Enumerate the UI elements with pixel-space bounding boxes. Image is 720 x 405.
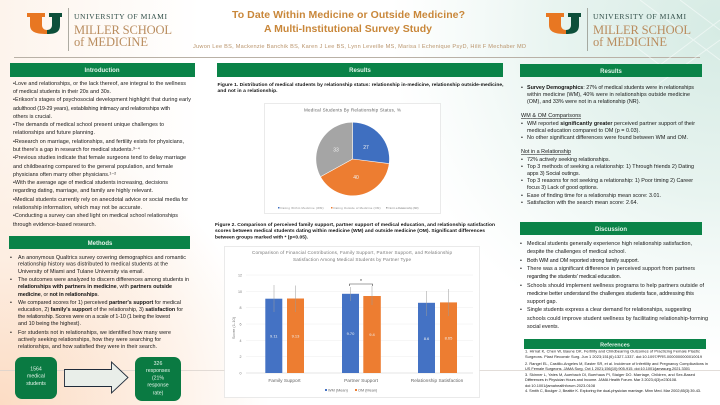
- text block: methods: [10, 255, 189, 350]
- pie legend: Dating Outside of Medicine (OM): [334, 206, 381, 210]
- text block: discussion: There was a significant difference in perceived support from partners: [527, 266, 695, 272]
- text block: introduction: •Medical students currently rely on anecdotal advice or social media for: [13, 197, 188, 203]
- heading: references: References: [600, 342, 630, 348]
- text block: discussion: social events.: [527, 324, 559, 330]
- icon: U mark: [27, 13, 62, 34]
- bars: 9.70: [347, 331, 355, 336]
- arrow: [64, 362, 128, 393]
- text block: WM and OM comparisons: •: [521, 135, 523, 141]
- pie chart: 40: [353, 175, 359, 181]
- text block: not in a relationship: Not in a Relationship: [521, 149, 571, 155]
- text block: not in a relationship: Ease of finding time for a relationship mean score: 3.01.: [527, 193, 661, 199]
- bars: 9.4: [369, 332, 376, 337]
- heading: references: [524, 339, 706, 349]
- text block: WM and OM comparisons: •: [521, 121, 523, 127]
- text block: references: Differences in Physician Hours and Income. JAMA Health Forum. Mar 3 2023;4(3):e230108.: [525, 377, 677, 382]
- text block: not in a relationship: focus 3) Lack of good options.: [527, 185, 598, 191]
- figure 1 caption: and not in a relationship.: [218, 88, 278, 94]
- left logo: MILLER SCHOOL: [74, 23, 172, 37]
- heading: introduction: [10, 63, 195, 77]
- bar chart panel: [224, 246, 480, 398]
- text block: survey demographics: within medicine (WM), 40% were in relationships outside medicine: [526, 92, 690, 98]
- callout: 326 responses: rate): [153, 390, 164, 396]
- heading: methods: [9, 236, 190, 249]
- text block: methods: An anonymous Qualtrics survey covering demographics and romantic: [18, 255, 186, 261]
- text block: methods: education, 2) family's support of the relationship, 3) satisfaction for: [18, 307, 183, 313]
- heading: results right: Results: [600, 69, 622, 75]
- text block: references: 1. Hirnat K, Chen W, Baune DK. Fertility and Childbearing Outcomes of Practicing Female Plastic: [525, 348, 700, 354]
- text block: introduction: physicians often marry other physicians.¹⁻²: [13, 172, 116, 178]
- heading: results right: [520, 64, 702, 77]
- bars: 8.65: [445, 336, 453, 340]
- text block: not in a relationship: •: [521, 157, 523, 163]
- text block: references: [525, 348, 708, 393]
- text block: discussion: •: [520, 283, 522, 289]
- callout: 1564 medical students: medical: [27, 374, 45, 380]
- text block: methods: relationships, and how satisfied they were in their search.: [18, 344, 157, 350]
- title: [232, 9, 465, 35]
- axis and gridlines: 4: [240, 339, 242, 343]
- text block: discussion: [520, 241, 708, 330]
- bars: 9.13: [292, 334, 300, 338]
- text block: references: 4. Smith C, Boulger J, Beattie K. Exploring the dual-physician marriage. Minn Med. Mar 2002;85(3):39-43.: [525, 388, 701, 393]
- right logo: UNIVERSITY OF MIAMI: [593, 12, 686, 21]
- text block: references: Surgeons. Plast Reconstr Surg. Jun 1 2023;151(6):1327-1337. doi:10.1097/PRS.0000000000010019: [525, 354, 702, 359]
- bar legend: OM (Mean): [358, 388, 378, 392]
- x labels: Relationship Satisfaction: [411, 378, 464, 384]
- bar chart panel: Comparison of Financial Contributions, Family Support, Partner Support, and Relationship: [252, 250, 452, 255]
- x labels: [268, 378, 464, 384]
- significance bracket: [350, 279, 372, 286]
- figure 2 caption: Figure 2. Comparison of perceived family support, partner support of medical education, and relationship satisfaction: [215, 222, 495, 228]
- axis and gridlines: 10: [238, 290, 242, 294]
- text block: survey demographics: [521, 85, 694, 105]
- bar legend: [325, 388, 378, 392]
- panel: results right: [520, 64, 702, 206]
- figure 2 caption: between groups marked with * (p<0.05).: [215, 234, 309, 240]
- text block: methods: the relationship. Scores were on a scale of 1-10 (1 being the lowest: [18, 314, 170, 320]
- text block: discussion: support gap.: [527, 299, 557, 305]
- text block: introduction: adulthood (19-29 years), establishing intimacy and relationships with: [13, 106, 170, 112]
- text block: not in a relationship: apps 3) Social outings.: [527, 171, 580, 177]
- text block: discussion: •: [520, 307, 522, 313]
- text block: not in a relationship: [521, 149, 694, 206]
- text block: methods: •: [10, 300, 12, 306]
- text block: WM and OM comparisons: [521, 113, 695, 141]
- authors: Juwon Lee BS, Mackenzie Banchik BS, Karen J Lee BS, Lynn Leveille MS, Marisa I Echenique PsyD, Hilit F Mechaber MD: [193, 44, 526, 50]
- figure 2 caption: scores between medical students dating within medicine (WM) and outside medicine (OM). Significant differences: [215, 228, 485, 234]
- right logo: [546, 8, 691, 51]
- text block: introduction: •Research on marriage, relationships, and fertility exists for physicians,: [13, 139, 184, 145]
- callout: 326 responses: responses: [146, 368, 170, 374]
- left logo: UNIVERSITY OF MIAMI: [74, 12, 167, 21]
- text block: discussion: Both WM and OM reported strong family support.: [527, 258, 639, 264]
- panel: introduction: [10, 63, 195, 228]
- text block: methods: and 10 being the highest).: [18, 321, 81, 327]
- callout: 326 responses: response: [147, 382, 169, 388]
- axis and gridlines: Score (1-10): [231, 316, 236, 339]
- text block: methods: relationships with partners in medicine, with partners outside: [18, 284, 172, 290]
- panel: methods: [9, 236, 190, 401]
- text block: discussion: •: [520, 258, 522, 264]
- text block: not in a relationship: Satisfaction with the search mean score: 2.64.: [527, 200, 638, 206]
- text block: methods: For students not in relationships, we identified how many were: [18, 330, 171, 336]
- text block: methods: relationship history was distributed to medical students at the: [18, 262, 168, 268]
- panel: results center: [215, 63, 504, 398]
- figure 1 caption: [218, 82, 504, 94]
- bars: 9.11: [270, 334, 278, 338]
- callout: 326 responses: 326: [154, 361, 162, 367]
- pie legend: [278, 206, 419, 210]
- text block: introduction: relationship information, which may not be accurate.: [13, 205, 142, 211]
- callout: 1564 medical students: students: [26, 381, 46, 387]
- axis and gridlines: 8: [240, 306, 242, 310]
- text block: methods: •: [10, 255, 12, 261]
- text block: introduction: •Erikson's stages of psychosocial development highlight that during early: [13, 97, 191, 103]
- text block: methods: The outcomes were analyzed to discern differences among students in: [18, 277, 189, 283]
- pie chart: 27: [363, 145, 369, 151]
- right logo: MILLER SCHOOL: [593, 23, 691, 37]
- text block: introduction: relationships and future planning.: [13, 130, 95, 136]
- text block: references: 3. Skinner L, Yates M, Auerbach DI, Buerhaus PI, Staiger DO. Marriage, Children, and Sex-Based: [525, 372, 695, 377]
- text block: survey demographics: •: [521, 85, 523, 91]
- pie chart: 33: [333, 148, 339, 154]
- right logo: of MEDICINE: [593, 35, 667, 49]
- text block: introduction: others is crucial.: [13, 114, 52, 120]
- text block: not in a relationship: •: [521, 200, 523, 206]
- panel: discussion: [520, 222, 708, 330]
- pie legend: Dating Within Medicine (WM): [280, 206, 324, 210]
- text block: survey demographics: Survey Demographics: 27% of medical students were in relationships: [527, 85, 694, 91]
- text block: introduction: •Previous studies indicate that female surgeons tend to delay marriage: [13, 155, 186, 161]
- text block: introduction: [13, 81, 191, 228]
- figure 2 caption: [215, 222, 495, 240]
- text block: WM and OM comparisons: WM & OM Comparisons: [521, 113, 581, 119]
- text block: WM and OM comparisons: WM reported significantly greater perceived partner support of their: [527, 121, 695, 127]
- axis and gridlines: 12: [238, 274, 242, 278]
- heading: introduction: Introduction: [84, 68, 120, 74]
- left logo: [27, 8, 172, 51]
- heading: discussion: [520, 222, 702, 235]
- axis and gridlines: 0: [240, 372, 242, 376]
- text block: discussion: •: [520, 241, 522, 247]
- left logo: of MEDICINE: [74, 35, 148, 49]
- text block: introduction: •Love and relationships, or the lack thereof, are integral to the wellness: [13, 81, 186, 87]
- error bars: [274, 285, 448, 316]
- callout: 326 responses: (21%: [152, 376, 164, 382]
- axis and gridlines: [231, 274, 473, 376]
- axis and gridlines: 6: [240, 322, 242, 326]
- pie chart panel: Medical Students By Relationship Status, %: [304, 108, 401, 112]
- callout: 1564 medical students: [15, 357, 57, 399]
- x labels: Partner Support: [344, 378, 379, 384]
- bars: [265, 294, 457, 373]
- text block: introduction: through evidence-based research.: [13, 222, 96, 228]
- significance bracket: *: [360, 279, 362, 285]
- pie legend: Not in a Relationship (NR): [388, 206, 419, 210]
- text block: introduction: but there's a gap in research for medical students.³⁻⁴: [13, 147, 141, 153]
- text block: introduction: •Conducting a survey can shed light on medical school relationships: [13, 213, 178, 219]
- text block: WM and OM comparisons: No other significant differences were found between WM and OM.: [527, 135, 688, 141]
- bars: 8.6: [424, 336, 430, 341]
- text block: introduction: regarding dating, marriage, and family are highly relevant.: [13, 188, 153, 194]
- text block: not in a relationship: •: [521, 178, 523, 184]
- text block: references: doi:10.1001/jamahealthforum.2023.0108: [525, 383, 595, 388]
- text block: survey demographics: (OM), and 33% were not in a relationship (NR).: [527, 99, 640, 105]
- heading: methods: Methods: [88, 241, 113, 247]
- text block: discussion: despite the challenges of medical school.: [527, 249, 626, 255]
- heading: results center: Results: [349, 68, 371, 74]
- text block: discussion: medicine better understand the challenges students face, addressing this: [527, 291, 694, 297]
- text block: discussion: Medical students generally experience high relationship satisfaction,: [527, 241, 692, 247]
- callout: 1564 medical students: 1564: [30, 366, 42, 372]
- callout: 326 responses: [135, 357, 181, 401]
- text block: not in a relationship: Top 3 reasons for not seeking a relationship: 1) Poor timing 2) Career: [527, 178, 693, 184]
- title: To Date Within Medicine or Outside Medicine?: [232, 9, 465, 21]
- heading: results center: [217, 63, 503, 77]
- text block: not in a relationship: •: [521, 164, 523, 170]
- text block: discussion: schools could improve student wellness by facilitating relationship-forming: [527, 316, 708, 322]
- pie chart: [316, 122, 389, 196]
- bar chart panel: Satisfaction Among Medical Students by Partner Type: [293, 257, 411, 262]
- text block: methods: •: [10, 277, 12, 283]
- pie chart panel: [264, 104, 440, 214]
- text block: introduction: and childbearing compared to the general population, and female: [13, 164, 173, 170]
- text block: methods: We compared scores for 1) perceived partner's support for medical: [18, 300, 181, 306]
- text block: not in a relationship: 72% actively seeking relationships.: [527, 157, 610, 163]
- text block: methods: •: [10, 330, 12, 336]
- bar legend: WM (Mean): [328, 388, 349, 392]
- text block: introduction: •The demands of medical school present unique challenges to: [13, 122, 164, 128]
- text block: methods: University of Miami and Tulane University via email.: [18, 269, 144, 275]
- text block: not in a relationship: •: [521, 193, 523, 199]
- text block: introduction: •With the average age of medical students increasing, decisions: [13, 180, 168, 186]
- axis and gridlines: 2: [240, 355, 242, 359]
- title: A Multi-Institutional Survey Study: [264, 23, 432, 35]
- heading: discussion: Discussion: [595, 227, 627, 233]
- text block: introduction: of medical students in their 20s and 30s.: [13, 89, 111, 95]
- text block: methods: actively seeking relationships, how they were searching for: [18, 337, 161, 343]
- icon: U mark right: [546, 13, 581, 34]
- x labels: Family Support: [268, 378, 301, 384]
- text block: discussion: Schools should implement wellness programs to help partners outside of: [527, 283, 704, 289]
- text block: references: US Female Surgeons. JAMA Surg. Oct 1 2021;156(10):905-915. doi:10.1001/jamasurg.2021.3301: [525, 366, 690, 371]
- text block: not in a relationship: Top 3 methods of seeking a relationship: 1) Through friends 2) Dating: [527, 164, 694, 170]
- text block: discussion: •: [520, 266, 522, 272]
- figure 1 caption: Figure 1. Distribution of medical students by relationship status: relationship in-medicine, relationship outside-medicine,: [218, 82, 504, 88]
- text block: discussion: Single students express a clear demand for relationships, suggesting: [527, 307, 691, 313]
- text block: references: 2. Rangel EL, Castillo-Angeles M, Easter SR, et al. Incidence of Infertility and Pregnancy Complications in: [525, 361, 708, 366]
- text block: discussion: regarding the students' medical education.: [527, 274, 621, 280]
- text block: WM and OM comparisons: medical education compared to OM (p = 0.03).: [527, 128, 640, 134]
- text block: methods: medicine, or not in relationships.: [18, 292, 99, 298]
- panel: references: [524, 339, 708, 393]
